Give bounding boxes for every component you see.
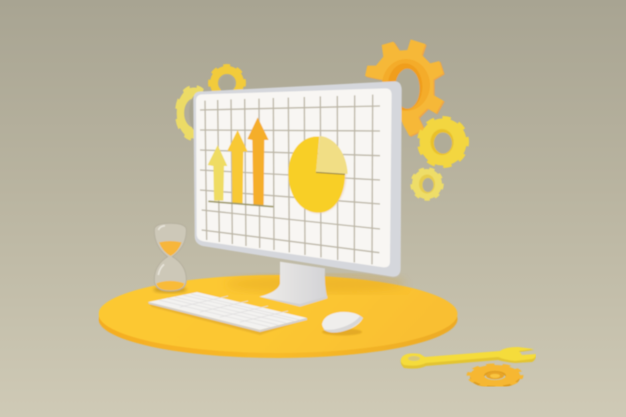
keyboard — [148, 292, 307, 335]
hourglass — [153, 223, 187, 293]
wrench — [401, 347, 536, 369]
pie chart — [288, 136, 348, 214]
mouse — [322, 312, 363, 336]
gear: floor — [470, 365, 520, 386]
arrow chart — [208, 117, 273, 207]
platform — [98, 275, 458, 358]
monitor shadow on platform — [225, 275, 405, 293]
monitor body — [193, 81, 402, 277]
chart grid — [200, 95, 380, 264]
gear: large orange — [365, 39, 445, 137]
gear: small yellow — [412, 170, 442, 198]
gear: medium yellow — [416, 115, 470, 169]
gear: back top — [208, 64, 246, 102]
monitor stand — [259, 262, 327, 307]
monitor screen — [196, 88, 392, 267]
monitor — [193, 81, 402, 307]
gear: back left — [174, 84, 214, 142]
